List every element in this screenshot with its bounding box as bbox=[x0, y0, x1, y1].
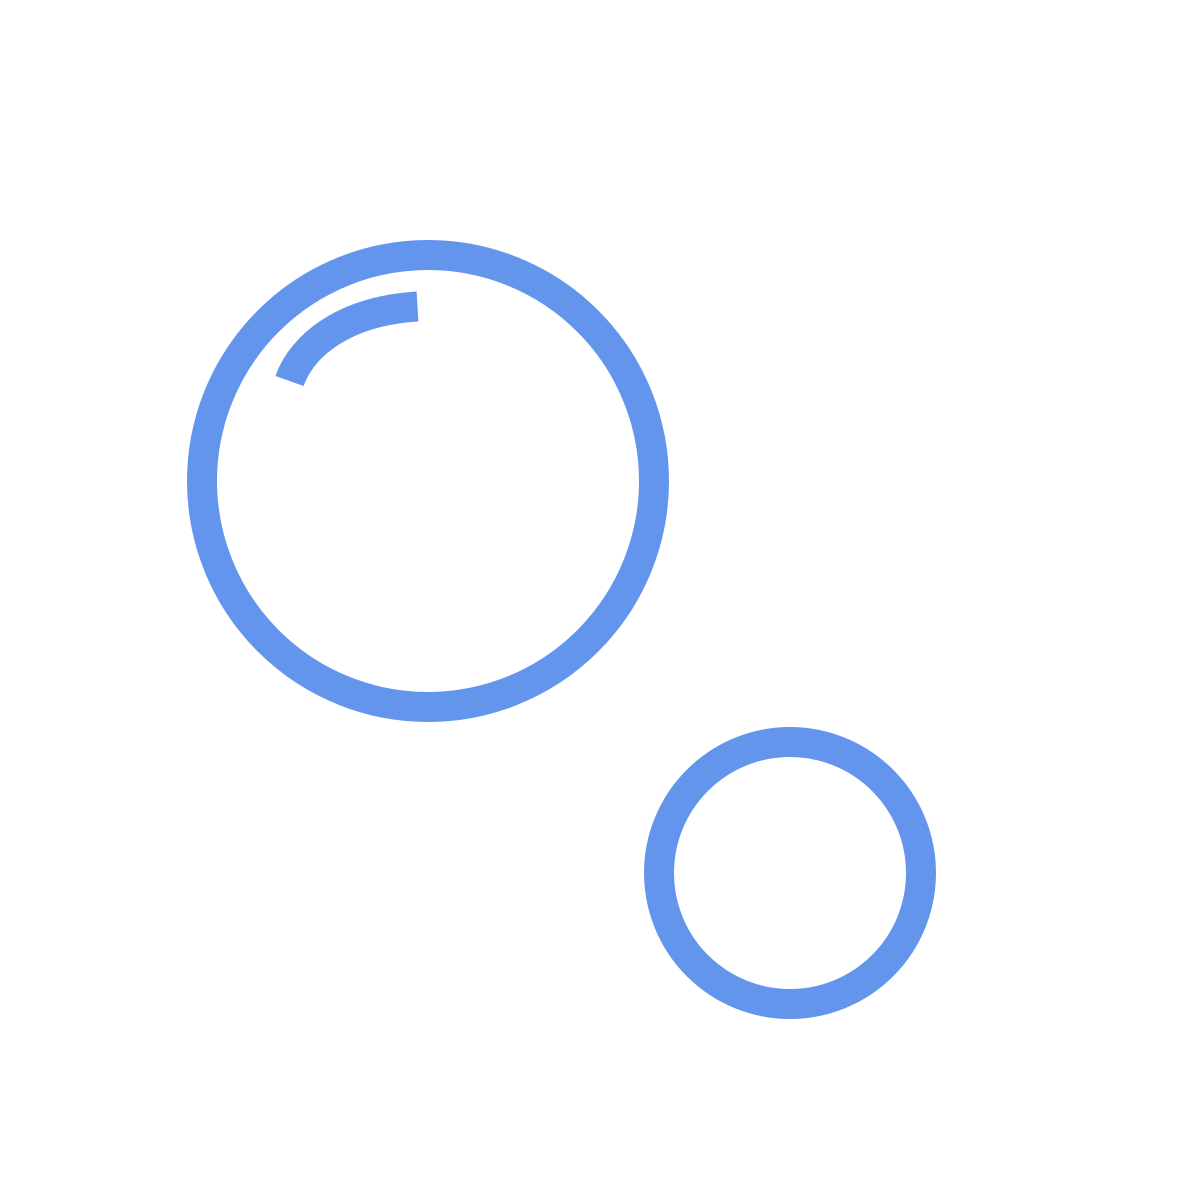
bubble highlight bbox=[290, 306, 418, 381]
large bubble bbox=[202, 255, 654, 707]
small bubble bbox=[659, 742, 921, 1004]
